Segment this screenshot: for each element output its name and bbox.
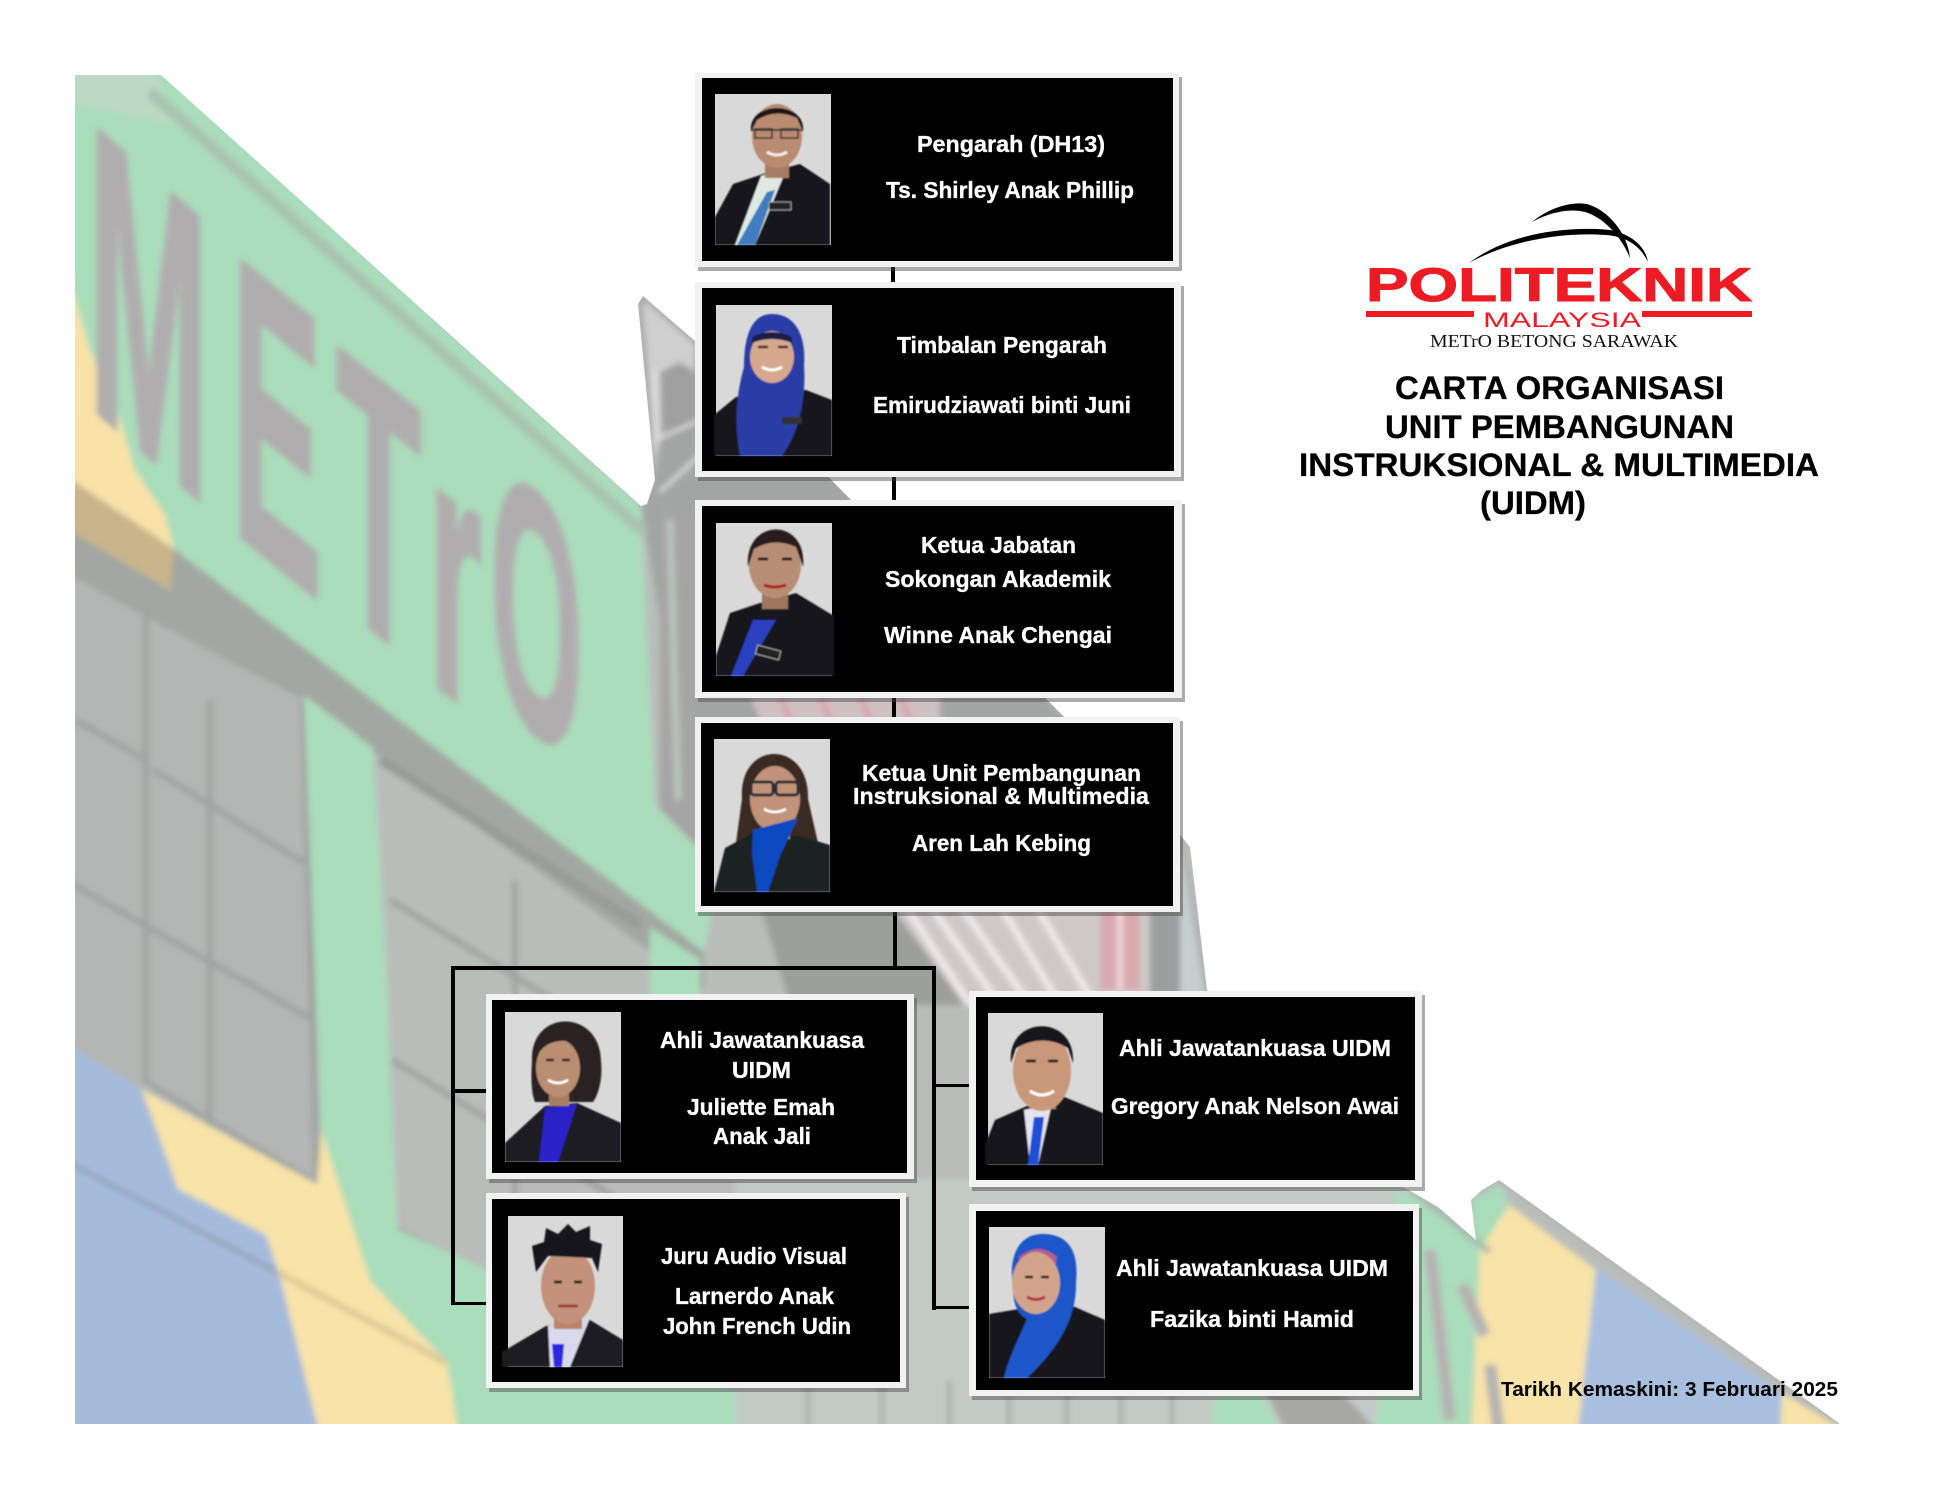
LED sign bbox=[890, 905, 1150, 1005]
name: Aren Lah Kebing: Aren Lah Kebing bbox=[912, 830, 1091, 856]
role: Ketua Jabatan Sokongan Akademik bbox=[885, 532, 1111, 592]
role: Ahli Jawatankuasa UIDM: Ahli Jawatankuasa bbox=[660, 1027, 864, 1053]
name: Larnerdo Anak John French Udin bbox=[663, 1283, 851, 1339]
title: UNIT PEMBANGUNAN bbox=[1385, 409, 1734, 445]
portrait: Emirudziawati binti Juni bbox=[714, 305, 832, 456]
yellow and tan corner bbox=[75, 288, 176, 550]
role: Ketua Jabatan Sokongan Akademik: Ketua Jabatan bbox=[921, 532, 1076, 558]
panel: Ketua Unit bbox=[695, 717, 1183, 916]
right windows and tower tones bbox=[640, 340, 1210, 1000]
panel: Ketua Jabatan bbox=[695, 500, 1185, 702]
name: Winne Anak Chengai: Winne Anak Chengai bbox=[884, 622, 1112, 648]
role: Ketua Unit Pembangunan Instruksional & Multimedia: Ketua Unit Pembangunan bbox=[862, 760, 1141, 786]
lower silver columns bbox=[735, 1180, 1420, 1440]
METrO letters on the sign: E bbox=[232, 169, 322, 688]
logo: Politeknik Malaysia METrO Betong Sarawak bbox=[1366, 203, 1752, 351]
title: INSTRUKSIONAL & MULTIMEDIA bbox=[1299, 447, 1819, 483]
title bbox=[1299, 370, 1819, 521]
name: Juliette Emah Anak Jali bbox=[687, 1094, 835, 1149]
role: Juru Audio Visual: Juru Audio Visual bbox=[661, 1243, 847, 1269]
role: Ahli Jawatankuasa UIDM: Ahli Jawatankuasa UIDM bbox=[1119, 1035, 1391, 1061]
name: Ts. Shirley Anak Phillip: Ts. Shirley Anak Phillip bbox=[886, 177, 1134, 203]
role: Pengarah (DH13): Pengarah (DH13) bbox=[917, 131, 1105, 157]
panel: Ahli Jawatankuasa Fazika bbox=[969, 1204, 1422, 1400]
name: Larnerdo Anak John French Udin: John French Udin bbox=[663, 1313, 851, 1339]
role: Ketua Jabatan Sokongan Akademik: Sokongan Akademik bbox=[885, 566, 1111, 592]
name: Fazika binti Hamid: Fazika binti Hamid bbox=[1150, 1306, 1354, 1332]
panel: Juru Audio Visual bbox=[486, 1193, 909, 1392]
logo: Politeknik Malaysia METrO Betong Sarawak: METrO BETONG SARAWAK bbox=[1430, 331, 1678, 351]
connector lines bbox=[451, 267, 970, 1310]
portrait: Shirley Anak Phillip bbox=[715, 94, 831, 245]
blue block bbox=[75, 1046, 319, 1424]
role: Ahli Jawatankuasa UIDM bbox=[660, 1027, 864, 1083]
METrO letters on the sign: r bbox=[428, 347, 482, 798]
sign bbox=[60, 60, 720, 952]
green column and floor bbox=[304, 695, 735, 1440]
logo: Politeknik Malaysia METrO Betong Sarawak: MALAYSIA bbox=[1483, 309, 1641, 332]
portrait: Fazika binti Hamid bbox=[989, 1227, 1105, 1378]
name: Emirudziawati binti Juni: Emirudziawati binti Juni bbox=[873, 392, 1131, 418]
role: Ketua Unit Pembangunan Instruksional & Multimedia: Instruksional & Multimedia bbox=[853, 783, 1149, 809]
right-hand windows bbox=[390, 880, 615, 1233]
left windows bbox=[60, 570, 317, 1184]
title: CARTA ORGANISASI bbox=[1395, 370, 1724, 406]
portrait: Winne Anak Chengai bbox=[716, 523, 834, 676]
METrO letters on the sign bbox=[94, 127, 582, 747]
METrO letters on the sign: T bbox=[336, 266, 422, 747]
role: Timbalan Pengarah: Timbalan Pengarah bbox=[897, 332, 1107, 358]
portrait: Larnerdo Anak John French Udin bbox=[502, 1216, 623, 1367]
panel: Ahli Jawatankuasa Juliette bbox=[486, 994, 917, 1183]
METrO letters on the sign: M bbox=[88, 32, 209, 595]
name: Juliette Emah Anak Jali: Juliette Emah bbox=[687, 1094, 835, 1120]
panel: Ahli Jawatankuasa Gregory bbox=[969, 991, 1425, 1191]
logo: Politeknik Malaysia METrO Betong Sarawak: POLITEKNIK bbox=[1366, 258, 1752, 311]
portrait: Juliette Emah Anak Jali bbox=[505, 1012, 621, 1162]
title: (UIDM) bbox=[1480, 485, 1586, 521]
update date: Tarikh Kemaskini: 3 Februari 2025 bbox=[1501, 1378, 1838, 1401]
role: Ketua Unit Pembangunan Instruksional & Multimedia bbox=[853, 760, 1149, 809]
portrait: Aren Lah Kebing bbox=[714, 739, 830, 892]
name: Juliette Emah Anak Jali: Anak Jali bbox=[713, 1123, 811, 1149]
METrO letters on the sign: O bbox=[490, 382, 583, 845]
dark gray zone left of the LED sign bbox=[760, 905, 970, 1005]
panel: Timbalan Pengarah bbox=[695, 282, 1184, 481]
role: Ahli Jawatankuasa UIDM: UIDM bbox=[732, 1057, 791, 1083]
portrait: Gregory Anak Nelson Awai bbox=[985, 1013, 1103, 1165]
name: Larnerdo Anak John French Udin: Larnerdo Anak bbox=[675, 1283, 834, 1309]
panel: Pengarah bbox=[695, 73, 1182, 271]
name: Gregory Anak Nelson Awai: Gregory Anak Nelson Awai bbox=[1111, 1093, 1399, 1119]
role: Ahli Jawatankuasa UIDM: Ahli Jawatankuasa UIDM bbox=[1116, 1255, 1388, 1281]
right end of the building bbox=[1340, 1180, 1490, 1440]
yellow block bbox=[142, 1090, 460, 1440]
underside dark band bbox=[60, 525, 704, 990]
